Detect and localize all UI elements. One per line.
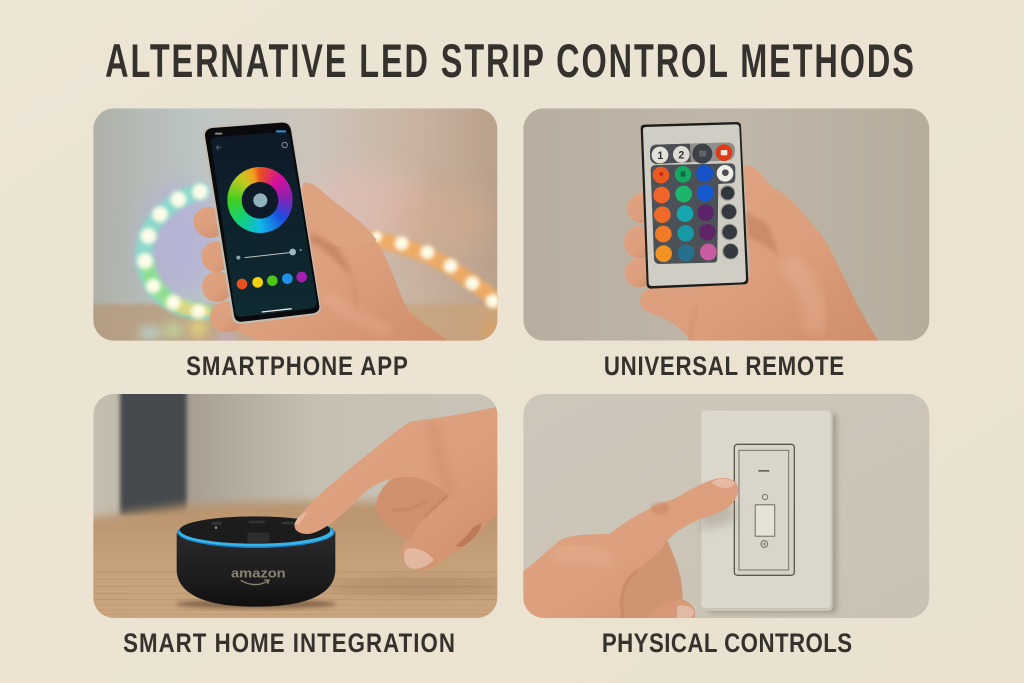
- table reflections: [138, 319, 497, 342]
- curled finger shading: [376, 477, 448, 540]
- phone: [203, 122, 321, 324]
- label: universal remote: UNIVERSAL REMOTE: [604, 352, 844, 381]
- remote top row: [650, 142, 735, 164]
- label: smart home integration: SMART HOME INTEGRATION: [123, 629, 455, 658]
- hand pressing: [294, 406, 500, 570]
- lower fingers: [622, 541, 682, 612]
- label: smartphone app: SMARTPHONE APP: [186, 352, 408, 381]
- amazon logo: amazon: [231, 567, 286, 581]
- smart speaker: [177, 516, 335, 607]
- panel: physical controls: [517, 394, 929, 620]
- panel: smartphone app: [83, 108, 510, 351]
- hand holding phone: [189, 183, 448, 341]
- hand holding remote: [624, 165, 878, 341]
- panel: smart home integration: [93, 394, 498, 618]
- wall switch plate: [701, 410, 833, 611]
- table: [83, 502, 510, 630]
- LED beads: [137, 184, 500, 319]
- remote: 1: [657, 150, 663, 162]
- color wheel: [227, 167, 293, 233]
- title: ALTERNATIVE LED STRIP CONTROL METHODS: [105, 34, 914, 87]
- thumbnail: [404, 548, 434, 569]
- panel: universal remote: [523, 108, 929, 341]
- toggle: [755, 504, 775, 537]
- color presets: [237, 279, 247, 289]
- hand pointing: [517, 478, 738, 620]
- remote color button grid: [651, 163, 735, 264]
- LED strip glow: [144, 191, 500, 312]
- remote: [641, 122, 748, 289]
- remote: 2: [678, 149, 684, 161]
- label: physical controls: PHYSICAL CONTROLS: [602, 629, 852, 658]
- brightness slider: [245, 252, 292, 258]
